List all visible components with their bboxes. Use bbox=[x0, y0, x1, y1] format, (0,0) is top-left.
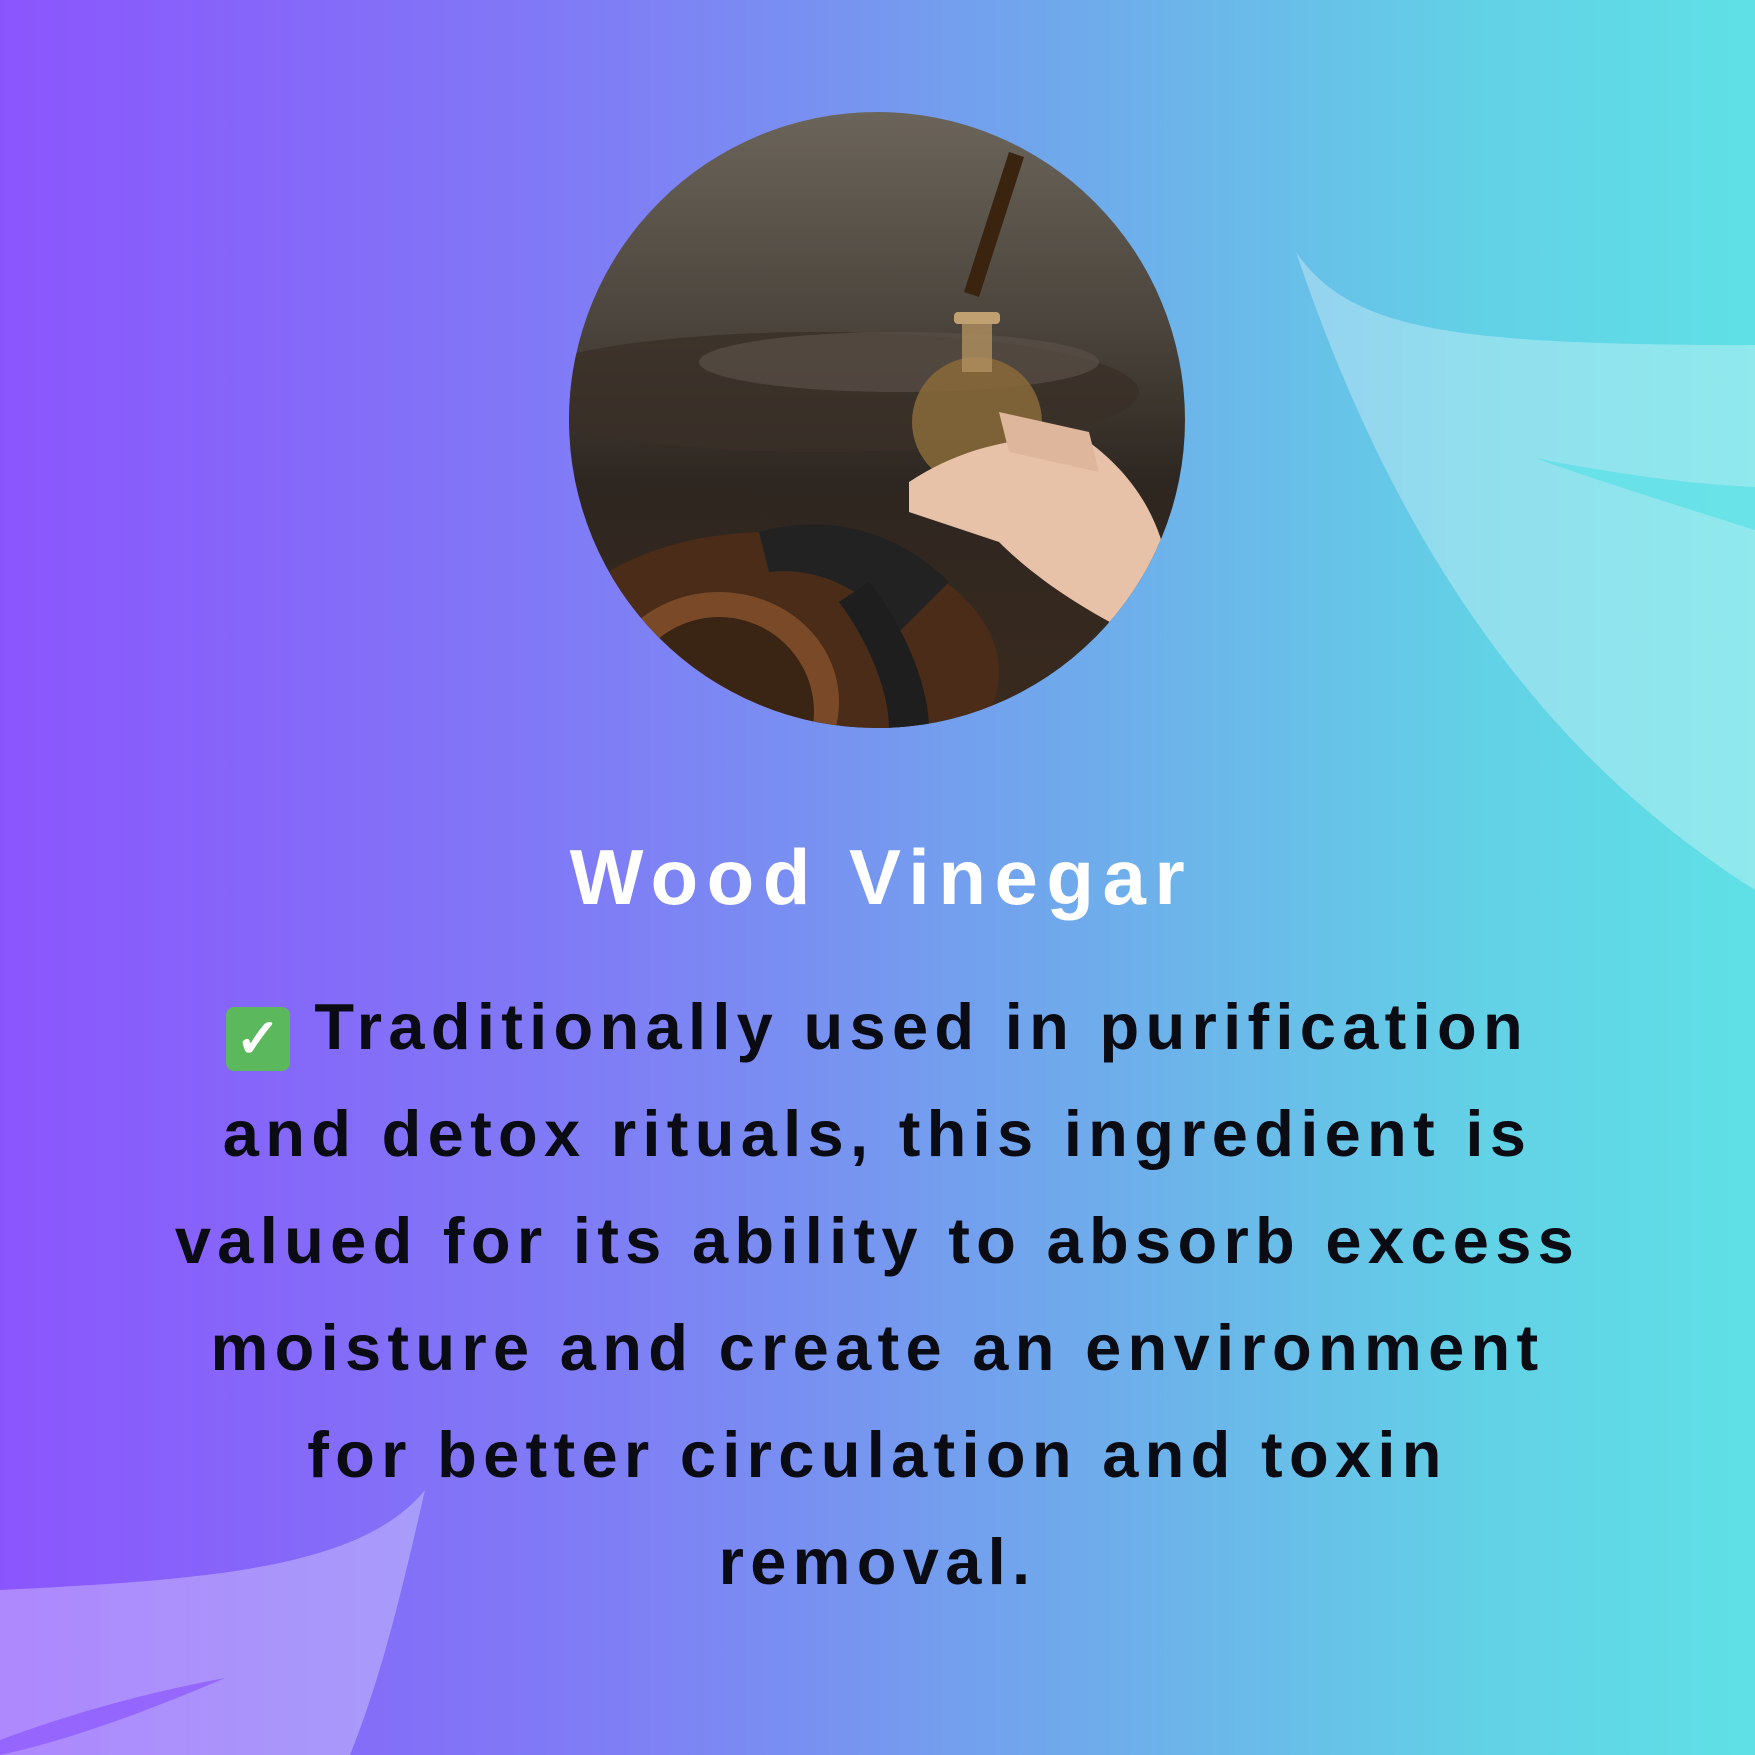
photo: wood vinegar dropper over barrel bbox=[569, 112, 1185, 728]
body text block bbox=[175, 990, 1580, 1598]
body text block: for better circulation and toxin bbox=[307, 1418, 1448, 1491]
body text block: moisture and create an environment bbox=[211, 1311, 1544, 1384]
body text block: ✓ bbox=[235, 1009, 281, 1069]
body text block: Traditionally used in purification bbox=[314, 990, 1529, 1063]
title: Wood Vinegar bbox=[570, 833, 1193, 921]
body text block: valued for its ability to absorb excess bbox=[175, 1204, 1580, 1277]
body text block: and detox rituals, this ingredient is bbox=[223, 1097, 1532, 1170]
body text block: removal. bbox=[719, 1525, 1036, 1598]
